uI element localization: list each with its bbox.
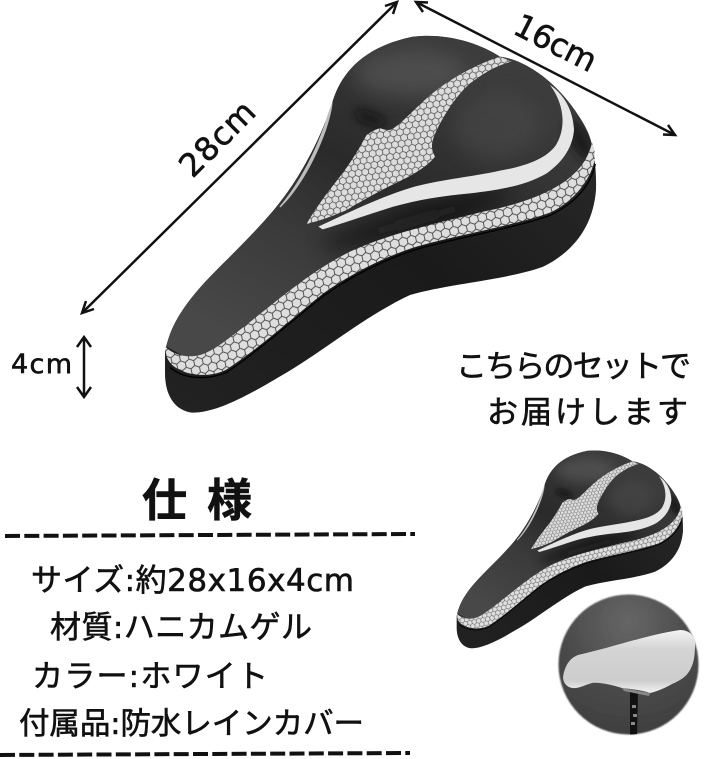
spec: colour: カラー:ホワイト xyxy=(32,659,268,695)
arrow: 28cm length xyxy=(82,2,397,313)
arrow: 4cm height xyxy=(77,337,91,397)
heading: specifications: 様 xyxy=(207,464,252,529)
caption: set contents xyxy=(456,349,691,431)
spec: size: サイズ:約28x16x4cm xyxy=(31,563,354,599)
arrow: 16cm width xyxy=(416,2,675,135)
caption: set contents: お届けします xyxy=(487,395,688,431)
spec list xyxy=(19,563,364,742)
label: 28cm: 28cm xyxy=(171,93,263,185)
heading: specifications: 仕 xyxy=(142,464,187,529)
heading: specifications xyxy=(142,464,252,529)
caption: set contents: こちらのセットで xyxy=(456,349,691,385)
label: 4cm: 4cm xyxy=(11,349,72,380)
spec: material: 材質:ハニカムゲル xyxy=(50,610,312,646)
photo: waterproof rain cover xyxy=(558,594,698,736)
spec: accessory: 付属品:防水レインカバー xyxy=(19,707,364,742)
product photo: large saddle xyxy=(165,36,600,413)
label: 16cm: 16cm xyxy=(508,6,603,80)
product photo: small saddle xyxy=(457,450,685,648)
